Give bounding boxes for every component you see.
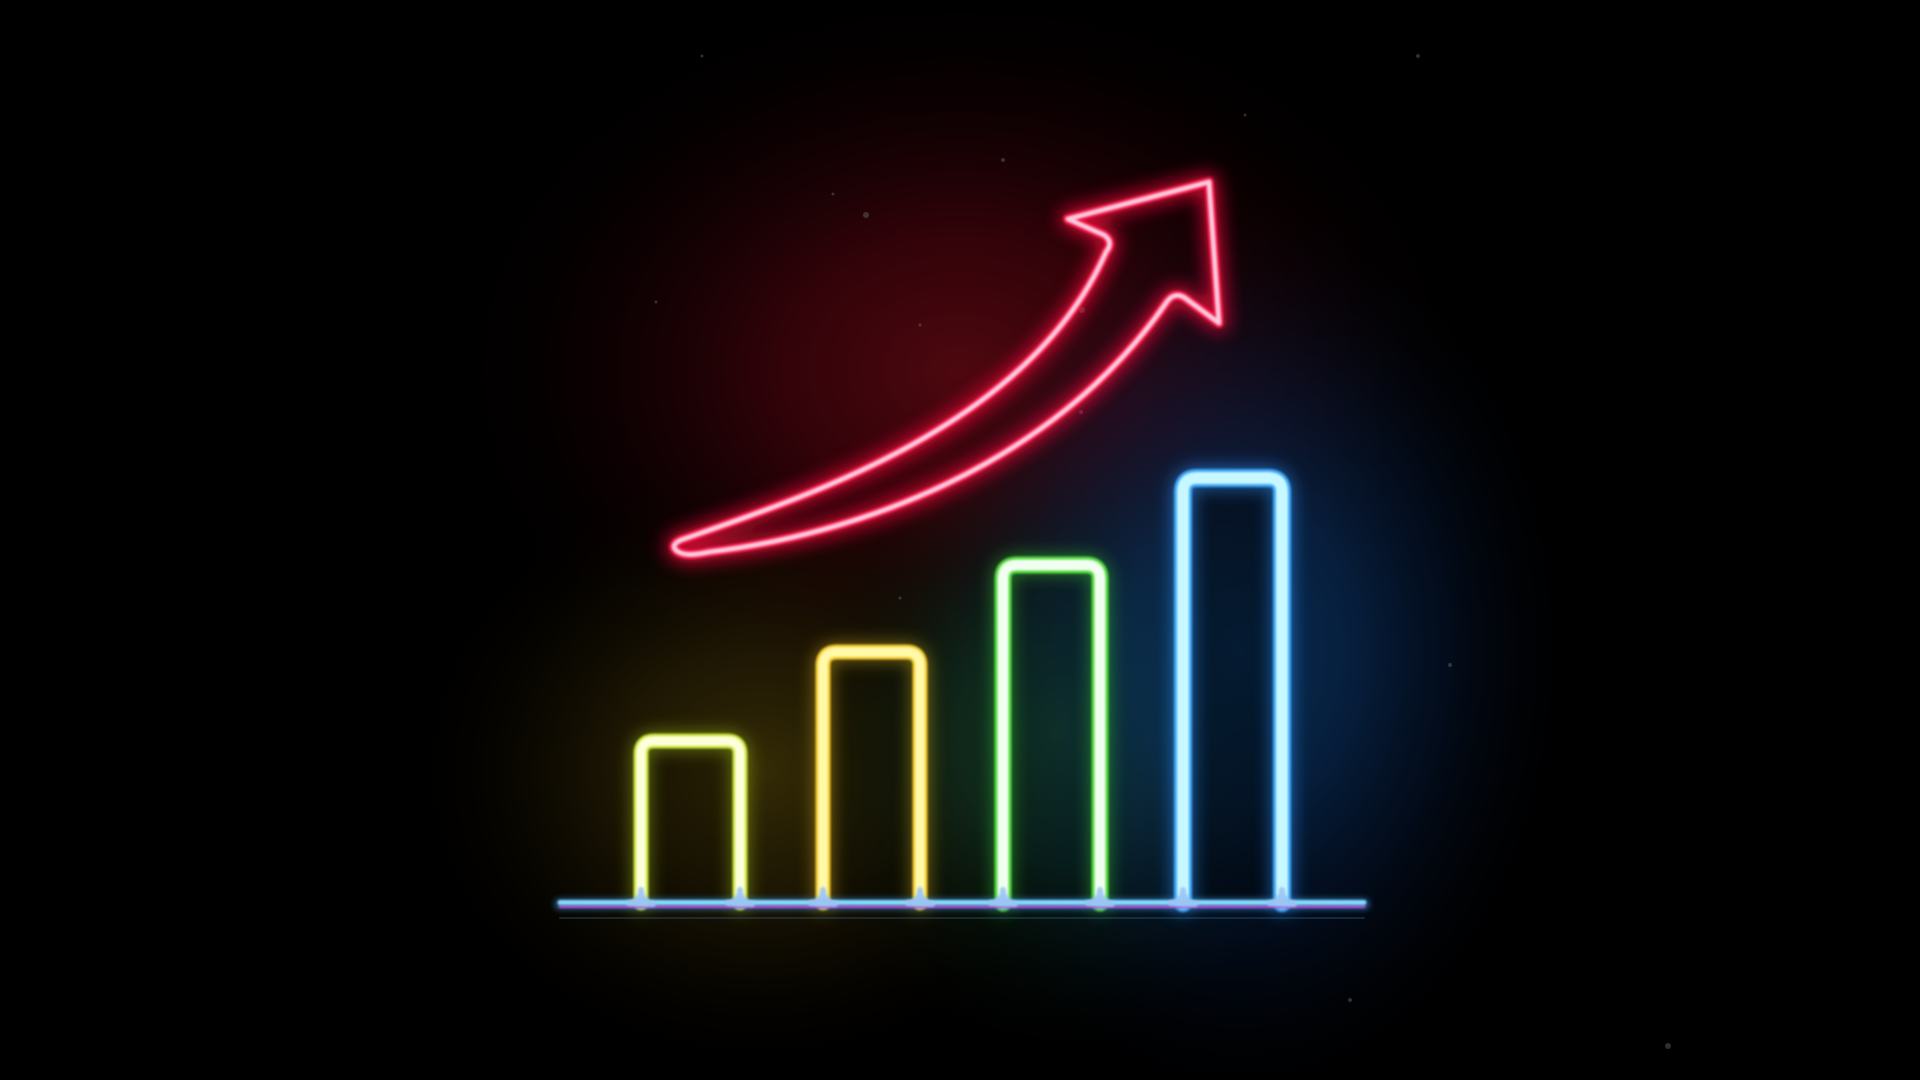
bar 2: yellow [823, 652, 920, 903]
bar 3: green [1003, 565, 1100, 903]
ambient glow: blue behind tall bar [910, 200, 1570, 1080]
baseline [560, 890, 1364, 918]
bar 1: yellow-green [641, 741, 740, 903]
ambient glow: red behind arrow [440, 0, 1480, 760]
ambient glow: yellow behind small bars [410, 470, 1110, 1070]
chart: bars and baseline [560, 478, 1364, 918]
baseline foot joints [629, 890, 1294, 904]
neon arrow [674, 182, 1219, 554]
ambient glow: green behind third bar [800, 410, 1320, 1050]
dust particles [654, 54, 1671, 1049]
bar 4: blue [1183, 478, 1282, 903]
